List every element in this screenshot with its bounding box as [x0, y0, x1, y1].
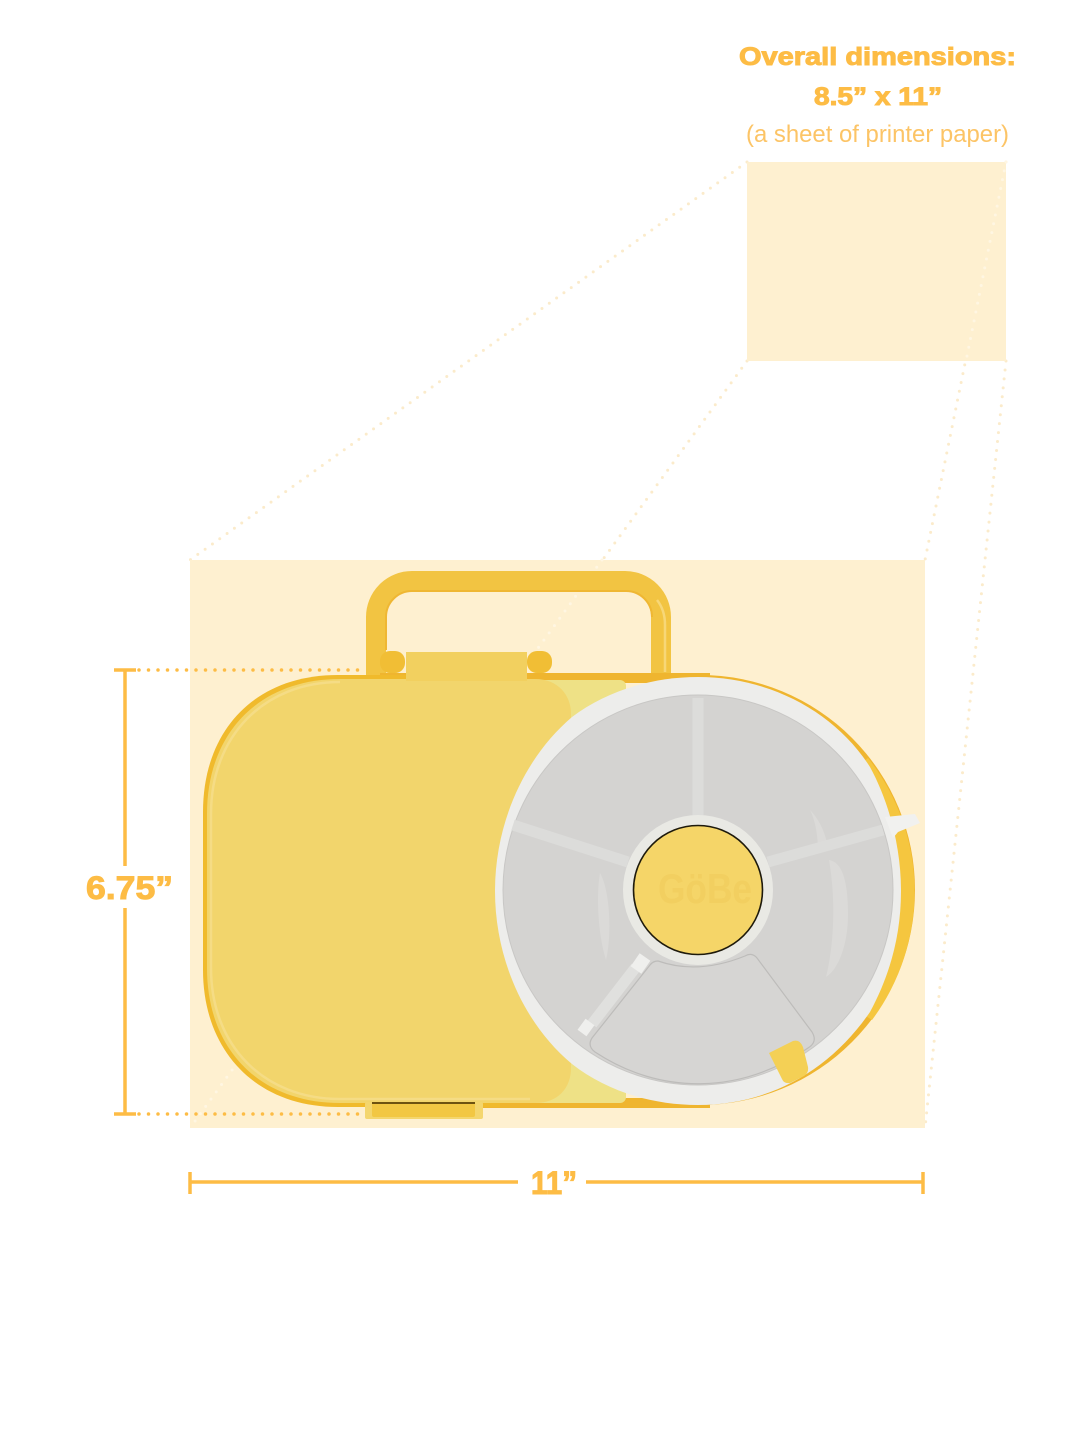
open compartment [590, 954, 814, 1084]
height dimension bracket [114, 670, 136, 1114]
panel: printer paper reference [747, 162, 1006, 361]
lid outer edge [203, 675, 500, 1107]
round container base [700, 675, 915, 1105]
bowl reflections [598, 810, 848, 977]
center button [634, 826, 762, 954]
panel: product footprint background [190, 560, 925, 1128]
white rim [495, 677, 901, 1105]
button logo: GöBe [658, 865, 752, 912]
dotted projection lines over panels [190, 162, 1006, 1128]
clear hinge bar [582, 957, 645, 1033]
hinge [380, 651, 552, 681]
lid [207, 679, 571, 1103]
width label: 11” [531, 1165, 577, 1201]
width dimension bracket [190, 1172, 923, 1194]
spinner dividers [513, 698, 883, 862]
base top and bottom edge [380, 673, 710, 1108]
lid highlight [211, 682, 530, 1099]
spinner disc [503, 695, 893, 1085]
lunchbox product illustration [203, 581, 920, 1119]
white latch tab [885, 814, 920, 838]
heading: paper size: 8.5” x 11” [814, 83, 942, 111]
yellow pull tab [769, 1041, 808, 1083]
handle [376, 581, 665, 680]
height label: 6.75” [86, 870, 173, 906]
dotted projection lines [190, 162, 1006, 1128]
dimension guides: dotted [139, 670, 364, 1114]
front clasp [365, 1102, 483, 1119]
center hub [623, 815, 773, 965]
heading: overall dimensions: Overall dimensions: [739, 43, 1016, 71]
text: printer paper note: (a sheet of printer paper) [746, 121, 1009, 148]
side latch [840, 758, 915, 1020]
inner tray [530, 680, 626, 1103]
